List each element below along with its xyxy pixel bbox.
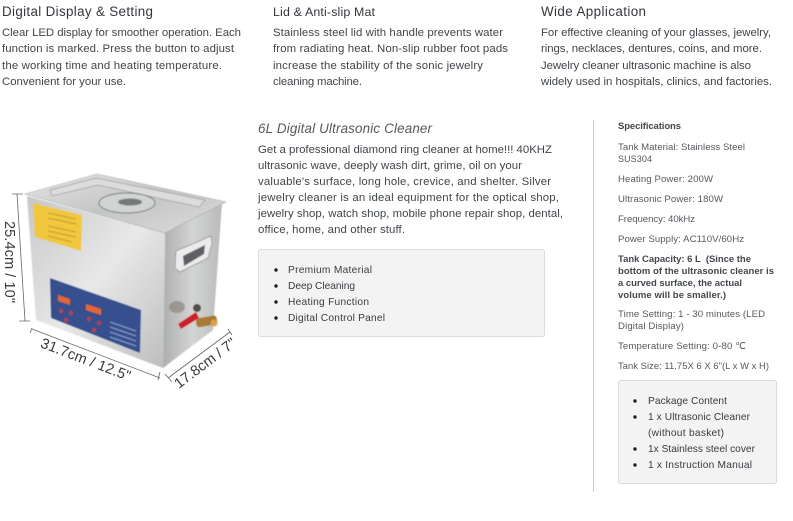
feature: digital display and setting <box>2 4 241 88</box>
text block: product description: ultrasonic wave, deeply wash dirt, grime, oil on your <box>258 160 522 172</box>
text block: wide application description <box>540 27 772 88</box>
spec list: SUS304 <box>618 154 652 164</box>
warning label <box>33 203 82 251</box>
tank front face <box>27 196 165 368</box>
control panel <box>50 278 141 353</box>
label: height: 25.4cm / 10" <box>1 221 17 303</box>
feature: lid and anti-slip mat <box>273 5 508 88</box>
feature: wide application <box>540 4 772 88</box>
text block: digital display description <box>2 27 241 88</box>
text block: lid and mat description: increase the stability of the sonic jewelry <box>273 60 483 72</box>
text block: product description <box>257 144 563 236</box>
spec list: Tank Capacity: 6 L (Since the <box>618 254 751 265</box>
text block: product description: Get a professional diamond ring cleaner at home!!! 40KHZ <box>258 144 552 156</box>
spec list: Power Supply: AC110V/60Hz <box>618 234 744 245</box>
text block: product description: valuable's surface, long hole, crevice, and shelter. Silver <box>258 176 551 188</box>
text block: wide application description: rings, necklaces, dentures, coins, and more. <box>541 43 762 55</box>
product title: 6L Digital Ultrasonic Cleaner <box>258 121 433 136</box>
panel: specifications <box>618 121 774 371</box>
text block: wide application description: widely used in hospitals, clinics, and factories. <box>540 76 772 88</box>
product image: ultrasonic cleaner with dimensions <box>1 174 240 392</box>
text block: product description: jewelry cleaner is an ideal equipment for the optical shop, <box>257 192 559 204</box>
text block: product description: office, home, and other stuff. <box>258 224 405 236</box>
spec list: volume will be smaller.) <box>618 290 726 301</box>
panel: feature list: Digital Control Panel <box>288 313 385 324</box>
panel: feature list: Premium Material <box>288 265 372 276</box>
tank side face <box>163 203 222 368</box>
spec list: Tank Size: 11.75X 6 X 6"(L x W x H) <box>618 360 769 371</box>
spec list: Frequency: 40kHz <box>618 214 695 225</box>
spec list: Temperature Setting: 0-80 ℃ <box>618 341 746 352</box>
text block: wide application description: For effective cleaning of your glasses, jewelry, <box>541 27 771 39</box>
spec list: Time Setting: 1 - 30 minutes (LED <box>618 309 765 320</box>
text block: product description: jewelry shop, watch shop, mobile phone repair shop, dental, <box>257 208 563 220</box>
text block: lid and mat description <box>273 27 508 88</box>
heading: digital display: Digital Display & Setting <box>2 4 153 19</box>
spec list: Heating Power: 200W <box>618 174 714 185</box>
panel: package content <box>618 380 776 484</box>
spec list: a curved surface, the actual <box>618 278 742 289</box>
label: width: 17.8cm / 7" <box>172 335 240 392</box>
text block: lid and mat description: from radiating heat. Non-slip rubber foot pads <box>273 43 508 55</box>
spec list: Digital Display) <box>618 321 684 332</box>
drain valve <box>169 301 218 329</box>
label: length: 31.7cm / 12.5" <box>38 336 133 385</box>
tank lid <box>25 174 226 233</box>
panel: package content: 1 x Ultrasonic Cleaner <box>648 412 751 423</box>
text block: digital display description: function is marked. Press the button to adjust <box>2 43 235 55</box>
tank artwork <box>25 174 226 368</box>
dimension lines <box>12 194 232 382</box>
text block: digital display description: Convenient for your use. <box>2 76 126 88</box>
text block: digital display description: Clear LED display for smoother operation. Each <box>2 27 241 39</box>
spec list: Ultrasonic Power: 180W <box>618 194 724 205</box>
side handle <box>175 236 212 272</box>
spec list: bottom of the ultrasonic cleaner is <box>618 266 774 277</box>
panel: package content: (without basket) <box>648 428 724 439</box>
text block: digital display description: the working time and heating temperature. <box>2 60 222 72</box>
panel: package content: Package Content <box>648 396 727 407</box>
spec list: Tank Material: Stainless Steel <box>618 142 745 153</box>
panel: package content: 1x Stainless steel cover <box>648 444 756 455</box>
panel: feature list: Deep Cleaning <box>288 281 355 292</box>
heading: lid and mat: Lid & Anti-slip Mat <box>273 5 376 19</box>
panel: feature list <box>258 250 544 336</box>
text block: lid and mat description: cleaning machine. <box>273 76 362 88</box>
panel: package content: 1 x Instruction Manual <box>648 460 752 471</box>
spec list <box>618 142 774 371</box>
text block: lid and mat description: Stainless steel lid with handle prevents water <box>273 27 503 39</box>
heading: specifications: Specifications <box>618 121 681 132</box>
text block: wide application description: Jewelry cleaner ultrasonic machine is also <box>541 60 751 72</box>
heading: wide application: Wide Application <box>541 4 646 19</box>
panel: feature list: Heating Function <box>288 297 369 308</box>
